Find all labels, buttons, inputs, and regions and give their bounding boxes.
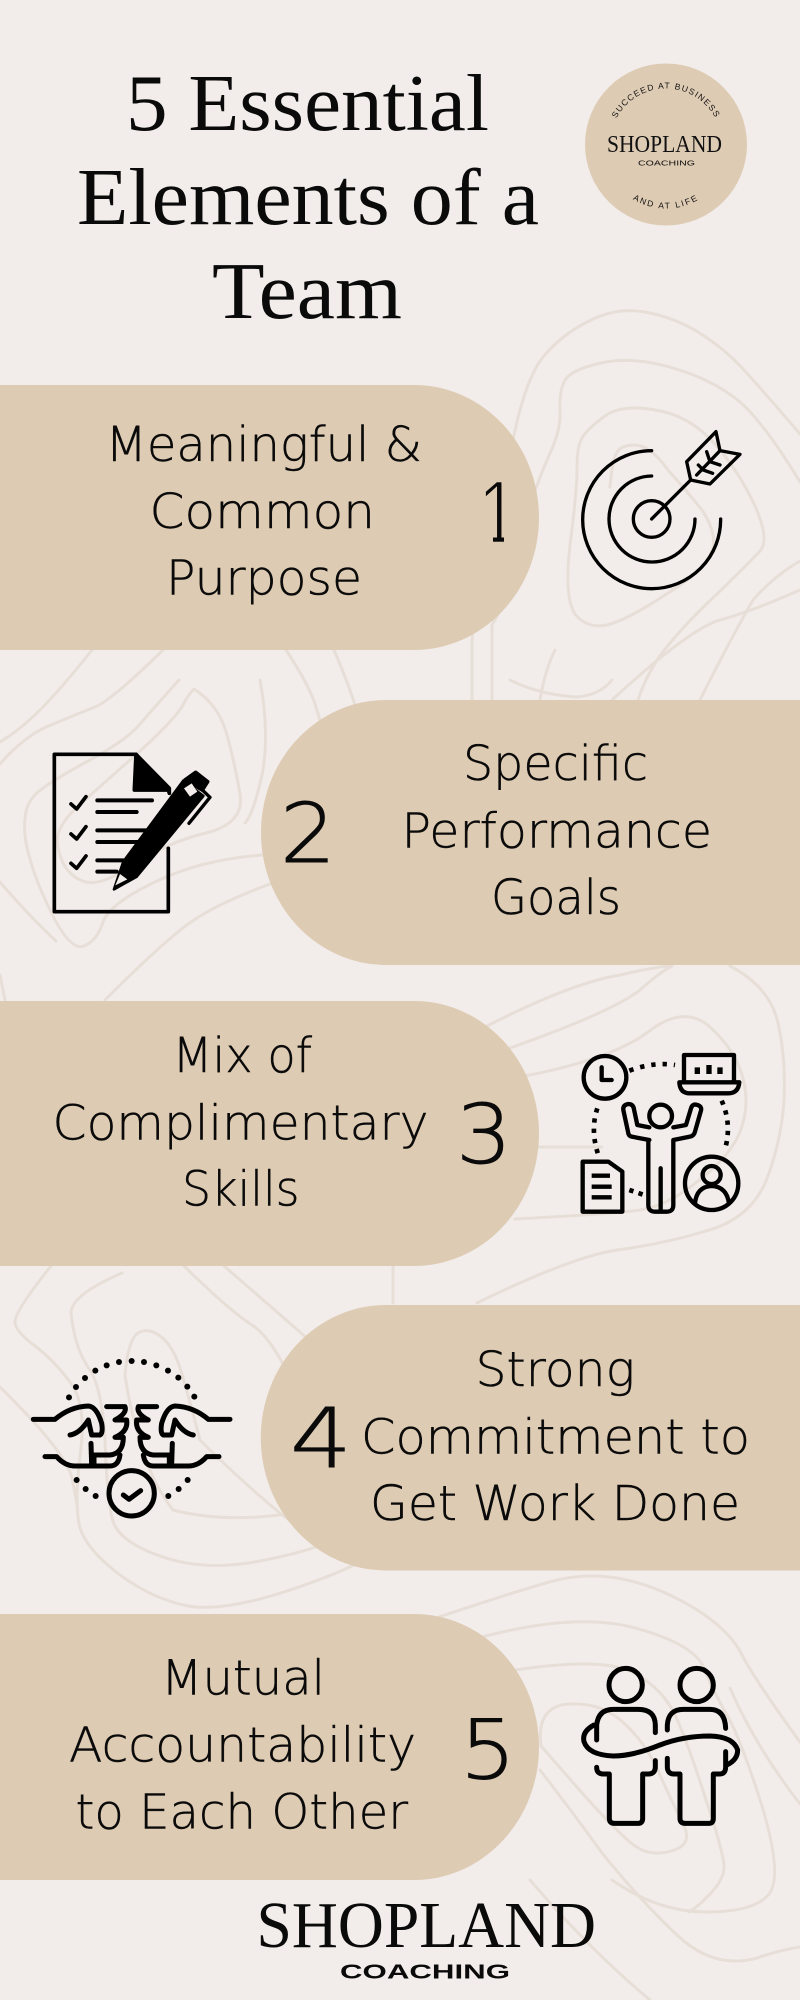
- panel 1: meaningful and common purpose: Meaningful &: [106, 417, 422, 473]
- panel 3: mix of complimentary skills: 3: [456, 1088, 512, 1183]
- logo badge: SUCCEED AT BUSINESS: [612, 82, 720, 118]
- panel 3: mix of complimentary skills: Mix of: [172, 1028, 312, 1084]
- icon: checklist and pen: [54, 754, 210, 912]
- panel 4: strong commitment to get work done: Strong: [476, 1342, 635, 1398]
- logo badge: [585, 64, 747, 226]
- panel 2: specific performance goals: Performance: [402, 804, 712, 860]
- icon: fist bump: [33, 1358, 230, 1516]
- panel 2: specific performance goals: Goals: [491, 870, 621, 926]
- panel 2: specific performance goals: Specific: [463, 736, 648, 792]
- logo badge: COACHING: [638, 158, 695, 168]
- panel 1: meaningful and common purpose: 1: [478, 463, 518, 563]
- footer logo: SHOPLAND: [256, 1889, 596, 1962]
- title: [77, 58, 539, 336]
- panel 1: meaningful and common purpose: Common: [150, 484, 375, 540]
- icon: two people linked: [584, 1668, 738, 1823]
- panel 5: mutual accountability: [0, 1614, 539, 1880]
- panel 2: specific performance goals: [261, 700, 800, 965]
- logo badge: AND AT LIFE: [632, 195, 698, 208]
- panel 5: mutual accountability: Mutual: [161, 1650, 325, 1706]
- panel 3: mix of complimentary skills: [0, 1001, 539, 1266]
- panel 2: specific performance goals: 2: [280, 787, 336, 882]
- panel 4: strong commitment to get work done: Get Work Done: [370, 1476, 740, 1532]
- panel 4: strong commitment to get work done: Commitment to: [361, 1410, 750, 1466]
- title: Team: [212, 246, 402, 336]
- footer logo: COACHING: [340, 1962, 510, 1984]
- panel 5: mutual accountability: Accountability: [69, 1718, 416, 1774]
- icon: person with tasks: [583, 1055, 739, 1212]
- panel 1: meaningful and common purpose: [0, 385, 539, 650]
- panel 3: mix of complimentary skills: Skills: [182, 1162, 300, 1218]
- icon: target and arrow: [583, 432, 740, 589]
- title: 5 Essential: [126, 58, 489, 148]
- panel 5: mutual accountability: 5: [460, 1704, 516, 1798]
- logo badge: SHOPLAND: [607, 132, 722, 158]
- panel 4: strong commitment to get work done: [261, 1305, 800, 1570]
- panel 3: mix of complimentary skills: Complimentary: [52, 1096, 428, 1152]
- panel 5: mutual accountability: to Each Other: [76, 1784, 408, 1840]
- panel 4: strong commitment to get work done: 4: [290, 1392, 352, 1487]
- title: Elements of a: [77, 152, 539, 242]
- panel 1: meaningful and common purpose: Purpose: [166, 550, 362, 606]
